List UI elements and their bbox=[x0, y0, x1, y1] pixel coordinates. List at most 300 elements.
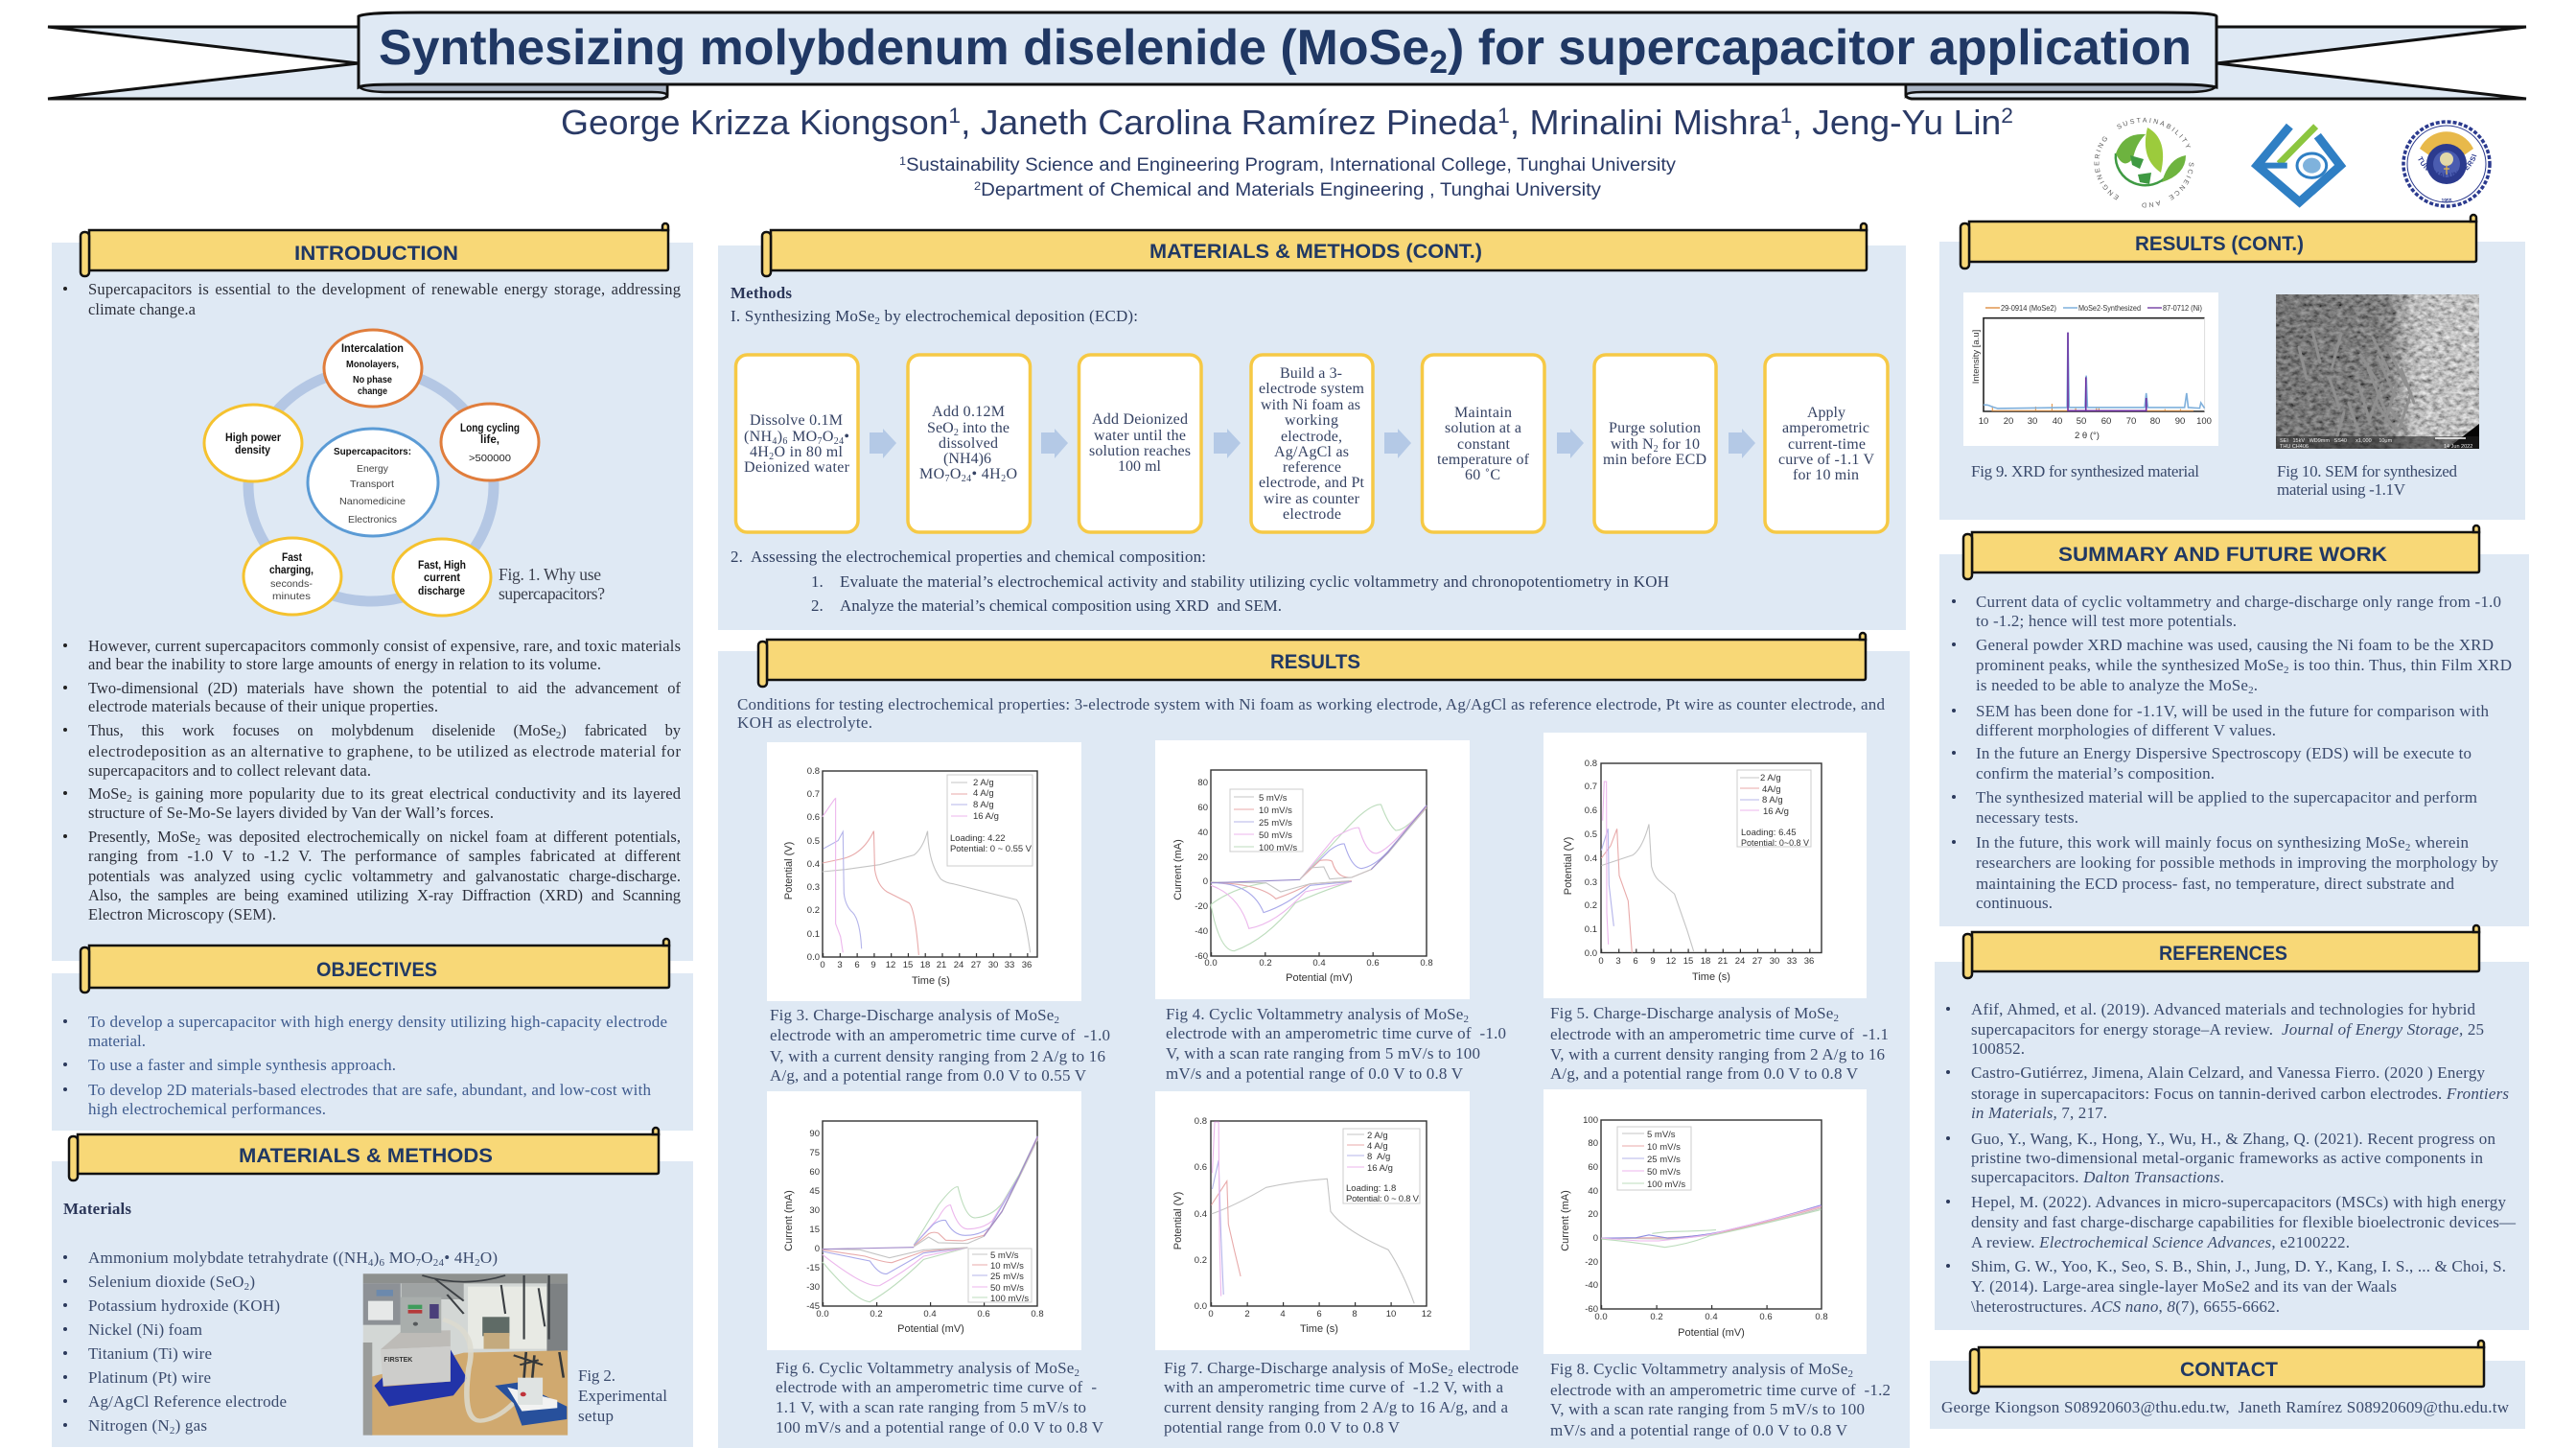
figure 3: charge-discharge -1.0 V: 36 bbox=[1022, 960, 1032, 970]
figure 4: cyclic voltammetry -1.0 V: -40 bbox=[1195, 926, 1208, 937]
caption: 2 bbox=[1055, 1015, 1059, 1026]
introduction banner: INTRODUCTION bbox=[294, 243, 458, 265]
figure 6: cyclic voltammetry -1.1 V: 0.0 bbox=[816, 1309, 829, 1320]
summary list: SEM has been done for -1.1V, will be used in the future for comparison with bbox=[1976, 702, 2489, 720]
method step one heading: 2 bbox=[874, 315, 880, 327]
figure 4: cyclic voltammetry -1.0 V: 10 mV/s bbox=[1259, 806, 1292, 816]
figure 4: cyclic voltammetry -1.0 V: -20 bbox=[1195, 901, 1208, 912]
method step two: 2. Assessing the electrochemical properties and chemical composition: bbox=[731, 548, 1206, 566]
materials list: 7 bbox=[416, 1257, 422, 1269]
intro remaining bullets bbox=[63, 637, 682, 923]
intro first bullet: Supercapacitors is essential to the development of renewable energy storage, addressing bbox=[88, 280, 681, 298]
figure 5: charge-discharge -1.1 V: 24 bbox=[1735, 956, 1745, 967]
circle: intercalation: change bbox=[358, 385, 387, 397]
summary list: 2 bbox=[2248, 685, 2254, 696]
caption: with an amperometric time curve of -1.2 V, with a bbox=[1164, 1378, 1503, 1396]
figure 5: charge-discharge -1.1 V: 6 bbox=[1633, 956, 1638, 967]
figure 5: charge-discharge -1.1 V: Potential: 0~0.8 V bbox=[1741, 838, 1810, 849]
authors: , Janeth Carolina Ramírez Pineda bbox=[961, 103, 1498, 142]
figure 8: cyclic voltammetry -1.2 V: 0.0 bbox=[1594, 1312, 1608, 1322]
contact banner bbox=[1970, 1341, 2484, 1393]
figure 3: charge-discharge -1.0 V: 4 A/g bbox=[973, 788, 994, 799]
figure 6: cyclic voltammetry -1.1 V: 15 bbox=[809, 1225, 820, 1235]
authors: , Mrinalini Mishra bbox=[1510, 103, 1781, 142]
circle: fast high current discharge: current bbox=[424, 572, 460, 584]
caption: A/g, and a potential range from 0.0 V to 0.55 V bbox=[770, 1066, 1087, 1085]
figure 6: cyclic voltammetry -1.1 V: 0.2 bbox=[870, 1309, 883, 1320]
figure 9: XRD chart: Intensity [a.u] bbox=[1971, 330, 1982, 384]
figure 7: charge-discharge -1.2 V: 8 A/g bbox=[1367, 1152, 1390, 1162]
figure 6: cyclic voltammetry -1.1 V: Current (mA) bbox=[783, 1190, 795, 1251]
figure 3: charge-discharge -1.0 V: 9 bbox=[870, 960, 876, 970]
logo: tunghai university seal: 1955 bbox=[2441, 199, 2452, 204]
step: apply amperometric curve: amperometric bbox=[1782, 420, 1869, 436]
figure 9: XRD chart: 2 θ (°) bbox=[2075, 431, 2100, 441]
figure 7: charge-discharge -1.2 V: Time (s) bbox=[1300, 1323, 1338, 1335]
curves bbox=[823, 1136, 1037, 1302]
intro first bullet bbox=[63, 280, 681, 318]
figure 7: charge-discharge -1.2 V: 0 bbox=[1208, 1309, 1214, 1320]
figure 9: XRD chart: 60 bbox=[2101, 416, 2111, 427]
step: add SeO2: 7 bbox=[945, 474, 950, 484]
materials list: Ag/AgCl Reference electrode bbox=[88, 1392, 287, 1411]
intro remaining bullets: electrodeposition as an alternative to graphene, to be utilized as electrode material for bbox=[88, 742, 681, 760]
figure 6: cyclic voltammetry -1.1 V: 90 bbox=[809, 1129, 820, 1139]
summary list: confirm the material’s composition. bbox=[1976, 764, 2215, 782]
figure 1 caption: supercapacitors? bbox=[499, 584, 605, 603]
objectives list: To develop a supercapacitor with high energy density utilizing high-capacity electrode bbox=[88, 1013, 667, 1031]
intro remaining bullets: Two-dimensional (2D) materials have shown the potential to aid the advancement of bbox=[88, 679, 681, 697]
step: add SeO2: • 4H bbox=[971, 466, 1001, 482]
figure 3: charge-discharge -1.0 V: 0.8 bbox=[807, 766, 820, 777]
intro remaining bullets: ) fabricated by bbox=[561, 721, 682, 739]
circle: supercapacitors centre: Energy bbox=[357, 463, 389, 475]
figure 6: cyclic voltammetry -1.1 V: -15 bbox=[806, 1263, 820, 1273]
ribbon left tail bbox=[48, 27, 667, 99]
curves bbox=[823, 799, 1031, 955]
figure 1: why use supercapacitors bbox=[204, 330, 539, 616]
figure 3: charge-discharge -1.0 V: 12 bbox=[886, 960, 895, 970]
materials list: Potassium hydroxide (KOH) bbox=[88, 1296, 280, 1315]
step: add SeO2: into the bbox=[959, 420, 1010, 436]
step: build 3-electrode system: electrode, bbox=[1281, 429, 1342, 445]
figure 6: cyclic voltammetry -1.1 V: 50 mV/s bbox=[990, 1283, 1024, 1294]
figure 7: charge-discharge -1.2 V: 8 bbox=[1352, 1309, 1358, 1320]
figure 3: charge-discharge -1.0 V: 6 bbox=[854, 960, 860, 970]
step: add SeO2: 2 bbox=[954, 428, 959, 438]
circle: fast high current discharge bbox=[393, 539, 491, 616]
summary list: continuous. bbox=[1976, 894, 2053, 912]
circle: long cycling life: >500000 bbox=[469, 453, 511, 464]
materials heading: Materials bbox=[63, 1200, 131, 1218]
figure 5: charge-discharge -1.1 V: 0.7 bbox=[1585, 782, 1597, 792]
intro remaining bullets: is gaining more popularity due to its great electrical conductivity and its layered bbox=[132, 784, 682, 803]
title ribbon bbox=[48, 12, 2526, 99]
intro remaining bullets: supercapacitors and to collect relevant data. bbox=[88, 761, 371, 780]
figure captions 9 and 10: Fig 9. XRD for synthesized material bbox=[1971, 462, 2199, 480]
figure 7: charge-discharge -1.2 V: 4 A/g bbox=[1367, 1141, 1388, 1152]
panel: results bbox=[718, 633, 1910, 1448]
intro remaining bullets: 2 bbox=[556, 730, 561, 741]
results banner: RESULTS bbox=[1270, 651, 1360, 673]
affiliations: 2 bbox=[974, 179, 982, 193]
caption: 100 mV/s and a potential range of 0.0 V to 0.8 V bbox=[776, 1418, 1104, 1436]
ribbon left fold bbox=[359, 82, 667, 95]
caption: mV/s and a potential range of 0.0 V to 0.8 V bbox=[1166, 1064, 1464, 1083]
figure 5: charge-discharge -1.1 V: 2 A/g bbox=[1760, 773, 1781, 783]
title: Synthesizing molybdenum diselenide (MoSe bbox=[379, 20, 1431, 76]
figure 9: XRD chart: 30 bbox=[2028, 416, 2037, 427]
figure 10: SEM micrograph: 14 Jun 2022 bbox=[2444, 444, 2472, 450]
summary list: Current data of cyclic voltammetry and charge-discharge only range from -1.0 bbox=[1976, 593, 2501, 611]
step: dissolve: Deionized water bbox=[744, 459, 850, 476]
figure 9: XRD chart: 80 bbox=[2150, 416, 2160, 427]
caption: electrode with an amperometric time curve of -1.0 bbox=[770, 1026, 1110, 1044]
figure 9: XRD chart: 90 bbox=[2175, 416, 2185, 427]
figure 4: cyclic voltammetry -1.0 V: 0 bbox=[1203, 876, 1208, 887]
intro remaining bullets: Thus, this work focuses on molybdenum diselenide (MoSe bbox=[88, 721, 556, 739]
figure 4: cyclic voltammetry -1.0 V: 60 bbox=[1197, 803, 1208, 813]
objectives list: material. bbox=[88, 1032, 146, 1050]
references list: in Materials, 7, 217. bbox=[1971, 1104, 2107, 1122]
caption: mV/s and a potential range of 0.0 V to 0.8 V bbox=[1550, 1421, 1848, 1439]
figure 5: charge-discharge -1.1 V: 33 bbox=[1787, 956, 1797, 967]
figure 2 caption bbox=[578, 1366, 667, 1425]
step: add deionized water: Add Deionized bbox=[1092, 411, 1188, 428]
references banner bbox=[1963, 925, 2479, 978]
curves bbox=[1211, 805, 1427, 951]
materials list: 2 bbox=[170, 1425, 174, 1436]
figure 8: cyclic voltammetry -1.2 V: 0.8 bbox=[1815, 1312, 1828, 1322]
step: build 3-electrode system: electrode bbox=[1283, 506, 1341, 523]
step: add SeO2: SeO bbox=[927, 420, 954, 436]
figure captions 9 and 10 bbox=[1971, 462, 2458, 499]
caption bbox=[1164, 1359, 1519, 1436]
step: add SeO2: 2 bbox=[1001, 474, 1006, 484]
figure 4: cyclic voltammetry -1.0 V: 100 mV/s bbox=[1259, 843, 1297, 853]
step: maintain temperature: constant bbox=[1457, 436, 1511, 453]
figure 8: cyclic voltammetry -1.2 V: 0.2 bbox=[1650, 1312, 1663, 1322]
circle: intercalation bbox=[324, 330, 422, 407]
figure 4: cyclic voltammetry -1.0 V: 0.4 bbox=[1312, 958, 1326, 969]
figure captions 9 and 10: material using -1.1V bbox=[2277, 480, 2406, 499]
figure 5: charge-discharge -1.1 V: Potential (V) bbox=[1563, 837, 1574, 895]
references list: Y. (2014). Large-area single-layer MoSe2 and its van der Waals bbox=[1971, 1277, 2397, 1296]
step: build 3-electrode system: with Ni foam as bbox=[1261, 397, 1360, 413]
materials list: Platinum (Pt) wire bbox=[88, 1368, 211, 1387]
figure 8: cyclic voltammetry -1.2 V: 5 mV/s bbox=[1647, 1130, 1676, 1140]
figure 7: charge-discharge -1.2 V: 16 A/g bbox=[1367, 1163, 1393, 1174]
step: dissolve: ) bbox=[777, 429, 782, 445]
authors: 2 bbox=[2001, 104, 2013, 128]
circle: fast high current discharge: Fast, High bbox=[418, 560, 466, 572]
circle: intercalation: Intercalation bbox=[341, 343, 404, 355]
figure 8: cyclic voltammetry -1.2 V: 50 mV/s bbox=[1647, 1167, 1681, 1178]
materials list: • 4H bbox=[444, 1249, 475, 1267]
materials list: ) bbox=[374, 1249, 379, 1267]
step: build 3-electrode system: electrode system bbox=[1259, 381, 1365, 397]
method step two: 2. bbox=[811, 596, 824, 615]
figure 3: charge-discharge -1.0 V: Time (s) bbox=[912, 975, 950, 987]
step: add deionized water: 100 ml bbox=[1118, 458, 1162, 475]
figure 10: SEM micrograph bbox=[2276, 294, 2479, 450]
materials list: Ammonium molybdate tetrahydrate ((NH bbox=[88, 1249, 368, 1267]
references list: density and fast charge-discharge capabilities for flexible bioelectronic devices— bbox=[1971, 1213, 2517, 1231]
intro remaining bullets: was deposited electrochemically on nickel foam at different potentials, bbox=[200, 828, 681, 846]
step: add SeO2: MO bbox=[919, 466, 944, 482]
flow arrows bbox=[870, 429, 1755, 458]
authors: George Krizza Kiongson bbox=[561, 103, 935, 142]
materials list: Nickel (Ni) foam bbox=[88, 1320, 202, 1339]
circle: fast charging: charging, bbox=[269, 565, 313, 576]
figure 7: charge-discharge -1.2 V bbox=[1155, 1091, 1519, 1436]
figure 3: charge-discharge -1.0 V: 21 bbox=[937, 960, 946, 970]
step: build 3-electrode system: wire as counter bbox=[1264, 491, 1360, 507]
intro remaining bullets: and bear the inability to store large amounts of energy in relation to its volume. bbox=[88, 655, 601, 673]
figure 9: XRD chart: 70 bbox=[2126, 416, 2136, 427]
figure 3: charge-discharge -1.0 V: 0.2 bbox=[807, 905, 820, 916]
caption: 1.1 V, with a scan rate ranging from 5 mV/s to bbox=[776, 1398, 1086, 1416]
intro remaining bullets: Presently, MoSe bbox=[88, 828, 196, 846]
results banner bbox=[758, 633, 1866, 687]
figure 3: charge-discharge -1.0 V: 0.6 bbox=[807, 812, 820, 823]
figure 6: cyclic voltammetry -1.1 V: 30 bbox=[809, 1205, 820, 1216]
figure 8: cyclic voltammetry -1.2 V: 80 bbox=[1588, 1138, 1598, 1149]
caption bbox=[1166, 1005, 1506, 1083]
step: dissolve: • bbox=[844, 429, 849, 445]
figure 3: charge-discharge -1.0 V: 33 bbox=[1005, 960, 1014, 970]
panel: results continued bbox=[1939, 215, 2525, 520]
ring bbox=[248, 369, 494, 601]
legend: MoSe2-Synthesized bbox=[2078, 303, 2141, 313]
figure 6: cyclic voltammetry -1.1 V: 0.8 bbox=[1031, 1309, 1044, 1320]
panel: contact bbox=[1930, 1341, 2525, 1429]
ribbon right tail bbox=[1906, 27, 2526, 99]
summary list: . bbox=[2254, 676, 2258, 694]
figure 5: charge-discharge -1.1 V: 15 bbox=[1683, 956, 1693, 967]
intro remaining bullets: 2 bbox=[196, 836, 200, 848]
materials list: ) bbox=[249, 1273, 255, 1291]
methods continued banner: MATERIALS & METHODS (CONT.) bbox=[1149, 241, 1482, 263]
figure 4: cyclic voltammetry -1.0 V: 25 mV/s bbox=[1259, 818, 1292, 829]
figure 7: charge-discharge -1.2 V: 2 A/g bbox=[1367, 1131, 1388, 1141]
references list: \heterostructures. ACS nano, 8(7), 6655-6662. bbox=[1971, 1297, 2280, 1316]
materials list: Selenium dioxide (SeO bbox=[88, 1273, 244, 1291]
curves bbox=[1601, 782, 1694, 953]
affiliations: Sustainability Science and Engineering Program, International College, Tunghai University bbox=[906, 155, 1677, 175]
figure 8: cyclic voltammetry -1.2 V: 0 bbox=[1593, 1233, 1598, 1244]
step: add SeO2: O bbox=[950, 466, 961, 482]
figure 6: cyclic voltammetry -1.1 V: -30 bbox=[806, 1282, 820, 1293]
figure 4: cyclic voltammetry -1.0 V: 0.2 bbox=[1259, 958, 1272, 969]
caption: 2 bbox=[1833, 1013, 1839, 1024]
step: apply amperometric curve bbox=[1765, 355, 1888, 532]
figure 8: cyclic voltammetry -1.2 V: 10 mV/s bbox=[1647, 1142, 1681, 1153]
summary banner bbox=[1963, 525, 2479, 579]
step: add SeO2: O bbox=[1006, 466, 1017, 482]
step: purge solution bbox=[1594, 355, 1716, 532]
figure 6: cyclic voltammetry -1.1 V: -45 bbox=[806, 1301, 820, 1312]
figure 8: cyclic voltammetry -1.2 V: 0.4 bbox=[1705, 1312, 1718, 1322]
figure 2 photo: experimental setup bbox=[363, 1273, 568, 1436]
figure 6: cyclic voltammetry -1.1 V: 0 bbox=[815, 1244, 820, 1254]
circle: supercapacitors centre: Supercapacitors: bbox=[334, 446, 411, 457]
summary list: The synthesized material will be applied to the supercapacitor and perform bbox=[1976, 788, 2477, 806]
references list: supercapacitors. Dalton Transactions. bbox=[1971, 1168, 2224, 1186]
figure 3: charge-discharge -1.0 V: Loading: 4.22 bbox=[950, 833, 1006, 844]
figure 7: charge-discharge -1.2 V: 4 bbox=[1280, 1309, 1286, 1320]
figure 5: charge-discharge -1.1 V: Loading: 6.45 bbox=[1741, 828, 1797, 838]
figure 8: cyclic voltammetry -1.2 V: Potential (mV) bbox=[1678, 1327, 1745, 1339]
circle: fast high current discharge: discharge bbox=[418, 586, 465, 597]
introduction banner bbox=[81, 223, 668, 276]
figure 10: SEM micrograph: THU CH406 bbox=[2280, 444, 2309, 450]
step: dissolve: 24 bbox=[834, 436, 844, 447]
legend bbox=[1985, 303, 2202, 313]
process flow bbox=[736, 355, 1888, 532]
figure 3: charge-discharge -1.0 V: 24 bbox=[954, 960, 963, 970]
summary list: In the future, this work will mainly focus on synthesizing MoSe bbox=[1976, 833, 2405, 852]
summary list: General powder XRD machine was used, causing the Ni foam to be the XRD bbox=[1976, 636, 2494, 654]
figure 3: charge-discharge -1.0 V: Potential (V) bbox=[783, 842, 795, 899]
figure 9: XRD chart: 10 bbox=[1979, 416, 1988, 427]
step: dissolve: MO bbox=[788, 429, 817, 445]
step: dissolve: 2 bbox=[769, 452, 774, 462]
summary list: maintaining the ECD process- fast, no temperature, direct substrate and bbox=[1976, 875, 2454, 893]
step: dissolve: 6 bbox=[782, 436, 787, 447]
method step two: Analyze the material’s chemical composition using XRD and SEM. bbox=[840, 596, 1282, 615]
figure 5: charge-discharge -1.1 V: 18 bbox=[1701, 956, 1710, 967]
caption: A/g, and a potential range from 0.0 V to 0.8 V bbox=[1550, 1064, 1859, 1083]
figure 4: cyclic voltammetry -1.0 V: 0.0 bbox=[1204, 958, 1218, 969]
step: maintain temperature: Maintain bbox=[1454, 405, 1512, 421]
caption: electrode with an amperometric time curve of -1.2 bbox=[1550, 1381, 1891, 1399]
caption: Fig 6. Cyclic Voltammetry analysis of MoSe bbox=[776, 1359, 1074, 1377]
summary list: researchers are looking for possible methods in improving the morphology by bbox=[1976, 853, 2498, 872]
objectives banner: OBJECTIVES bbox=[316, 959, 437, 981]
figure 5: charge-discharge -1.1 V: 8 A/g bbox=[1762, 795, 1783, 806]
figure 9: XRD chart: 40 bbox=[2053, 416, 2062, 427]
caption: V, with a current density ranging from 2 A/g to 16 bbox=[1550, 1045, 1885, 1063]
references list bbox=[1946, 1000, 2517, 1316]
affiliations: 1 bbox=[899, 154, 906, 168]
circle: high power density bbox=[204, 405, 302, 481]
caption: electrode with an amperometric time curve of -1.0 bbox=[1166, 1024, 1506, 1042]
step: maintain temperature: temperature of bbox=[1437, 452, 1530, 468]
caption: electrode bbox=[1453, 1359, 1519, 1377]
step: add SeO2 bbox=[908, 355, 1030, 532]
figure 8: cyclic voltammetry -1.2 V: 100 bbox=[1583, 1115, 1598, 1126]
figure 7: charge-discharge -1.2 V: 2 bbox=[1244, 1309, 1250, 1320]
figure 1 caption: Fig. 1. Why use bbox=[499, 565, 601, 584]
figure 5: charge-discharge -1.1 V: 0.4 bbox=[1585, 853, 1597, 864]
circle: fast charging: minutes bbox=[272, 591, 311, 602]
figure 4: cyclic voltammetry -1.0 V: 0.8 bbox=[1420, 958, 1433, 969]
step: maintain temperature: 60 ˚C bbox=[1465, 467, 1500, 483]
ribbon right fold bbox=[1906, 82, 2216, 95]
figure 9: XRD chart: 50 bbox=[2077, 416, 2086, 427]
references list: pristine two-dimensional metal-organic frameworks as active components in bbox=[1971, 1149, 2483, 1167]
ribbon main band bbox=[359, 12, 2216, 87]
references banner: REFERENCES bbox=[2159, 943, 2287, 965]
step: build 3-electrode system: Ag/AgCl as bbox=[1274, 444, 1349, 460]
references list: Shim, G. W., Yoo, K., Seo, S. B., Shin, J., Jung, D. Y., Kang, I. S., ... & Choi, S. bbox=[1971, 1257, 2506, 1275]
logo: chemical engineering department bbox=[2257, 127, 2340, 202]
intro remaining bullets: structure of Se-Mo-Se layers divided by Van der Wall’s forces. bbox=[88, 804, 494, 822]
figure 6: cyclic voltammetry -1.1 V: 45 bbox=[809, 1186, 820, 1197]
circle: supercapacitors centre: Electronics bbox=[348, 514, 397, 525]
authors: 1 bbox=[1497, 104, 1510, 128]
figure 8: cyclic voltammetry -1.2 V: -60 bbox=[1585, 1304, 1598, 1315]
method step two: 1. bbox=[811, 572, 824, 591]
step: apply amperometric curve: current-time bbox=[1788, 436, 1866, 453]
figure 9: XRD chart: 100 bbox=[2196, 416, 2212, 427]
curves bbox=[1601, 1205, 1822, 1248]
figure 5: charge-discharge -1.1 V: 3 bbox=[1615, 956, 1621, 967]
figure 4: cyclic voltammetry -1.0 V: 5 mV/s bbox=[1259, 793, 1288, 804]
figure 3: charge-discharge -1.0 V: 0 bbox=[820, 960, 825, 970]
materials list: Nitrogen (N bbox=[88, 1416, 170, 1435]
figure 5: charge-discharge -1.1 V: 0.3 bbox=[1585, 877, 1597, 888]
figure 6: cyclic voltammetry -1.1 V bbox=[767, 1091, 1104, 1436]
figure 3: charge-discharge -1.0 V: 30 bbox=[988, 960, 998, 970]
figure 5: charge-discharge -1.1 V: 0.8 bbox=[1585, 759, 1597, 769]
caption bbox=[1550, 1004, 1889, 1083]
caption: V, with a scan rate ranging from 5 mV/s to 100 bbox=[1166, 1044, 1480, 1063]
step: purge solution: for 10 bbox=[1659, 436, 1700, 453]
summary list: is needed to be able to analyze the MoSe bbox=[1976, 676, 2248, 694]
circle: intercalation: No phase bbox=[353, 374, 392, 385]
caption: electrode with an amperometric time curve of - bbox=[776, 1378, 1097, 1396]
intro remaining bullets: Also, the samples are being examined utilizing X-ray Diffraction (XRD) and Scanning bbox=[88, 886, 681, 904]
objectives list: high electrochemical performances. bbox=[88, 1100, 326, 1118]
step: apply amperometric curve: curve of -1.1 V bbox=[1778, 452, 1874, 468]
step: build 3-electrode system: reference bbox=[1283, 459, 1341, 476]
figure 3: charge-discharge -1.0 V: 2 A/g bbox=[973, 778, 994, 788]
objectives list: To use a faster and simple synthesis approach. bbox=[88, 1056, 396, 1074]
figure 6: cyclic voltammetry -1.1 V: 75 bbox=[809, 1148, 820, 1158]
summary list bbox=[1952, 593, 2512, 912]
materials and methods banner: MATERIALS & METHODS bbox=[239, 1145, 493, 1167]
materials list: MO bbox=[384, 1249, 415, 1267]
figure 5: charge-discharge -1.1 V bbox=[1543, 733, 1889, 1083]
intro first bullet: climate change.a bbox=[88, 300, 197, 318]
method step one heading: by electrochemical deposition (ECD): bbox=[880, 307, 1138, 325]
figure 6: cyclic voltammetry -1.1 V: 10 mV/s bbox=[990, 1261, 1024, 1272]
methods heading: Methods bbox=[731, 284, 792, 302]
figure 7: charge-discharge -1.2 V: 0.4 bbox=[1195, 1209, 1207, 1220]
summary banner: SUMMARY AND FUTURE WORK bbox=[2058, 544, 2387, 566]
figure 9: XRD chart bbox=[1963, 292, 2218, 446]
intro remaining bullets: However, current supercapacitors commonly consist of expensive, rare, and toxic materials bbox=[88, 637, 681, 655]
authors: 1 bbox=[1780, 104, 1792, 128]
figure 2 caption: Fig 2. bbox=[578, 1366, 615, 1385]
summary list: 2 bbox=[2284, 665, 2289, 676]
circle: supercapacitors centre: Nanomedicine bbox=[339, 496, 406, 507]
references list: A review. Electrochemical Science Advances, e2100222. bbox=[1971, 1233, 2350, 1251]
authors: 1 bbox=[948, 104, 961, 128]
figure 7: charge-discharge -1.2 V: 6 bbox=[1316, 1309, 1322, 1320]
figure 7: charge-discharge -1.2 V: 12 bbox=[1422, 1309, 1431, 1320]
figure 5: charge-discharge -1.1 V: 9 bbox=[1650, 956, 1656, 967]
circle: intercalation: Monolayers, bbox=[346, 359, 399, 370]
circle: fast charging: seconds- bbox=[270, 578, 313, 590]
caption bbox=[776, 1359, 1104, 1436]
figure 5: charge-discharge -1.1 V: 4A/g bbox=[1762, 784, 1781, 795]
figure 9: XRD chart: 20 bbox=[2004, 416, 2013, 427]
caption: V, with a current density ranging from 2 A/g to 16 bbox=[770, 1047, 1105, 1065]
intro remaining bullets: potentials was analyzed using cyclic voltammetry and galvanostatic charge-discharge. bbox=[88, 867, 681, 885]
